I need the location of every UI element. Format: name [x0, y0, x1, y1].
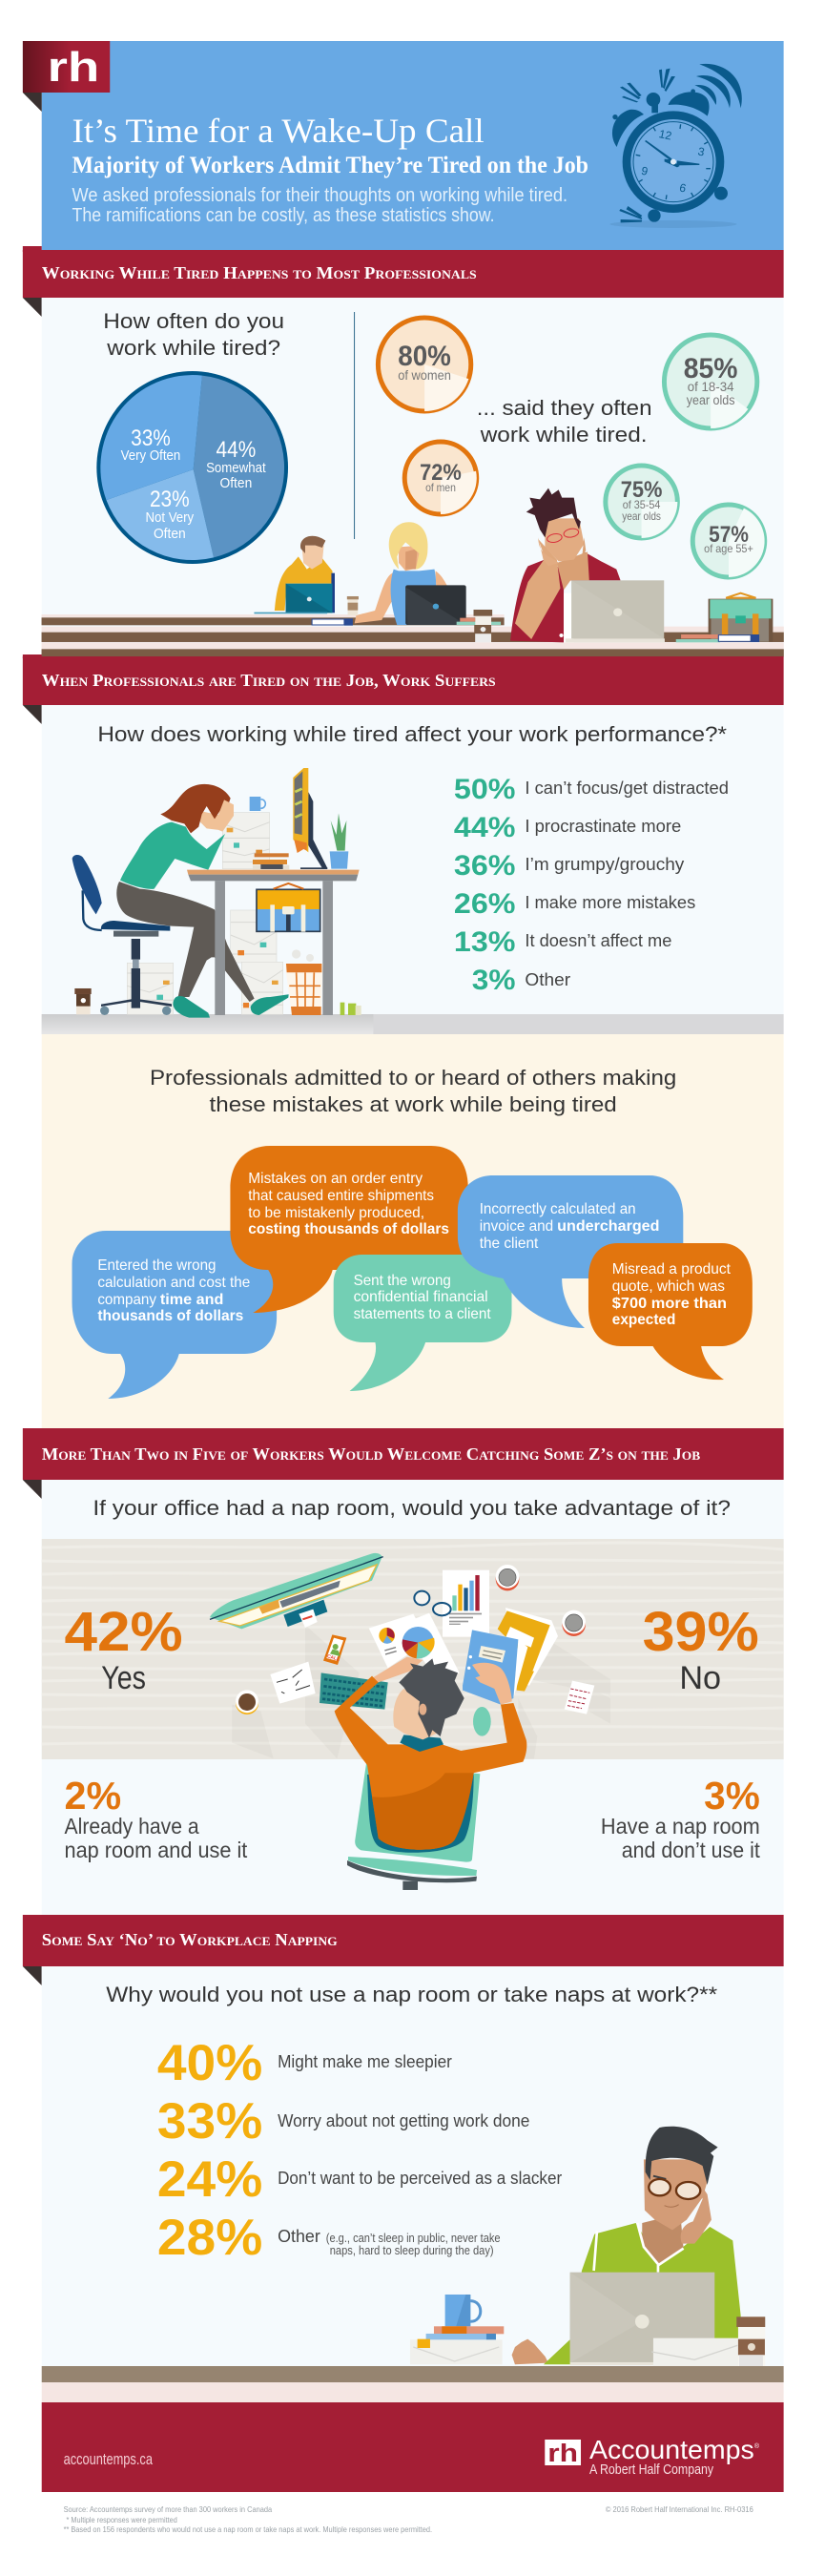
stat: 3% have and don't use: 3%: [704, 1774, 760, 1818]
stat: 42% yes: Yes: [101, 1660, 146, 1696]
chart paper: [443, 1570, 489, 1637]
circle: 75% of 35-54: 75%: [621, 477, 662, 503]
logo: [23, 41, 110, 112]
circle: 85% of 18-34: [664, 335, 757, 428]
reasons list: 24%: [157, 2151, 262, 2208]
circle: 85% of 18-34: year olds: [687, 392, 734, 407]
man: [544, 2127, 742, 2365]
panel: nap room: [42, 1480, 784, 1915]
stats list: I procrastinate more: [525, 817, 681, 836]
circle: 72% of men: of men: [425, 481, 456, 494]
pie chart: Very Often: [121, 447, 180, 464]
bubble: invoice: Incorrectly calculated an: [480, 1201, 636, 1217]
text: said they often: work while tired.: [480, 423, 648, 447]
bubble: wrong calculation: time and: [160, 1292, 223, 1308]
circle: 57% of age 55+: [692, 505, 765, 577]
stats list: Other: [525, 970, 570, 989]
books and mug: [250, 797, 289, 870]
mouse: [473, 1707, 491, 1736]
bubble: order entry: Mistakes on an order entry: [248, 1171, 423, 1187]
stat: 2% already have: Already have a: [65, 1814, 199, 1839]
reasons list: naps, hard to sleep during the day): [330, 2243, 494, 2257]
bubble: product quote: expected: [612, 1312, 675, 1328]
stats list: I’m grumpy/grouchy: [525, 855, 684, 874]
bubble: order entry: costing thousands of dollars: [248, 1221, 449, 1237]
circle: 85% of 18-34: 85%: [684, 353, 737, 384]
monitor: [293, 768, 327, 869]
accountemps logo: rh: [547, 2441, 578, 2467]
section ribbon 1: [23, 246, 784, 317]
section ribbon 3: [23, 1428, 784, 1499]
bubble: product quote: [588, 1243, 753, 1380]
section ribbon 4: [23, 1915, 784, 1985]
accountemps logo: Accountemps: [589, 2435, 754, 2464]
bubble: product quote: $700 more than: [612, 1296, 727, 1312]
circle: 80% of women: 80%: [398, 341, 451, 372]
stats list: 13%: [454, 926, 515, 958]
reasons list: 40%: [157, 2035, 262, 2091]
reasons list: Don’t want to be perceived as a slacker: [278, 2169, 562, 2188]
papers and coffee: [651, 2316, 765, 2368]
bubble: wrong calculation: thousands of dollars: [97, 1308, 243, 1324]
pie chart: 44%: [217, 437, 256, 463]
footer url: accountemps.ca: [64, 2450, 153, 2468]
reasons list: 33%: [157, 2093, 262, 2150]
section ribbon 2: [23, 654, 784, 724]
bubble: financial statements: confidential financial: [354, 1289, 488, 1305]
coffee cup: [74, 988, 92, 1014]
pie chart: 23%: [150, 487, 190, 512]
stat: 39% no: 39%: [643, 1602, 759, 1663]
bubble: invoice: the client: [480, 1236, 539, 1252]
footer: [42, 2402, 784, 2492]
section ribbon 4: Some Say ‘No’ to Workplace Napping: [42, 1930, 338, 1949]
stat: 39% no: [643, 1602, 759, 1696]
bubble: wrong calculation: [72, 1231, 277, 1399]
stat: 42% yes: 42%: [65, 1602, 183, 1663]
bubble: financial statements: statements to a client: [354, 1306, 491, 1322]
desk band: [42, 2366, 784, 2402]
bubble: order entry: [230, 1146, 468, 1313]
bubble: invoice: invoice and: [480, 1218, 553, 1235]
icon: alarm clock: 6: [678, 180, 688, 196]
text: said they often: [477, 396, 652, 447]
note: [270, 1662, 316, 1704]
stat: 3% have and don't use: [601, 1774, 760, 1862]
bubble: product quote: quote, which was: [612, 1278, 725, 1295]
circle: 72% of men: [404, 442, 477, 514]
office chair: [72, 855, 172, 1015]
icon: alarm clock: 12: [658, 127, 673, 143]
pie chart: Somewhat: [206, 460, 266, 476]
circle: 57% of age 55+: 57%: [709, 522, 749, 548]
plant: [330, 813, 348, 869]
source notes: [64, 2504, 753, 2534]
circle: 85% of 18-34: of 18-34: [688, 379, 734, 394]
source notes: © 2016 Robert Half International Inc. RH-0316: [606, 2504, 753, 2514]
paper stacks: [127, 813, 283, 1014]
stats list: 50%: [454, 774, 515, 805]
bubble: wrong calculation: calculation and cost the: [97, 1275, 250, 1291]
reasons list: (e.g., can’t sleep in public, never take: [326, 2231, 501, 2245]
illustration: man with laptop: [410, 2127, 765, 2368]
stat: 3% have and don't use: Have a nap room: [601, 1814, 760, 1839]
desk shadows: [232, 1625, 610, 1758]
heading: how often: How often do you: [103, 309, 284, 333]
icon: alarm clock: 3: [697, 144, 706, 159]
stat: 39% no: No: [679, 1660, 721, 1696]
source notes: * Multiple responses were permitted: [67, 2515, 177, 2524]
reasons list: Worry about not getting work done: [278, 2111, 529, 2130]
heading: how often: work while tired?: [106, 336, 280, 360]
circle: 57% of age 55+: of age 55+: [704, 542, 753, 555]
stats list: 44%: [454, 812, 515, 843]
stats list: I can’t focus/get distracted: [525, 779, 729, 798]
stat: 2% already have: nap room and use it: [65, 1838, 248, 1862]
coffee cup: [236, 1690, 258, 1714]
pie chart: [96, 371, 288, 564]
desk: [187, 870, 360, 1015]
accountemps logo: [545, 2435, 760, 2478]
icon: alarm clock: [609, 64, 742, 228]
checklist note: [565, 1681, 594, 1714]
cans on floor: [340, 1003, 361, 1015]
heading: reasons: Why would you not use a nap room or take naps at work?**: [106, 1983, 718, 2006]
bubble: financial statements: [334, 1255, 511, 1391]
reasons list: 28%: [157, 2210, 262, 2266]
heading: how often: [103, 309, 284, 360]
bubble: financial statements: Sent the wrong: [354, 1273, 451, 1289]
wood desk band: [42, 1539, 784, 1759]
reasons list: Might make me sleepier: [278, 2052, 452, 2071]
intro text: We asked professionals for their thoughts on working while tired.: [72, 185, 567, 206]
stats list: [454, 774, 729, 996]
circle: 75% of 35-54: of 35-54: [623, 498, 661, 511]
accountemps logo: A Robert Half Company: [589, 2462, 714, 2478]
source notes: ** Based on 156 respondents who would not use a nap room or take naps at work. Multiple responses were permitted.: [64, 2524, 432, 2534]
bubble: invoice: [458, 1175, 683, 1328]
mug and books: [410, 2295, 504, 2364]
illustration: top view man at desk: [210, 1553, 610, 1890]
icon: alarm clock: 9: [640, 164, 650, 178]
heading: nap room: If your office had a nap room, would you take advantage of it?: [93, 1496, 731, 1520]
worker: tired man with glasses: [510, 488, 665, 642]
heading: mistakes: these mistakes at work while being tired: [210, 1092, 617, 1116]
blue folder: [463, 1630, 527, 1705]
pie chart: Not Very: [146, 509, 195, 526]
bubble: order entry: that caused entire shipments: [248, 1188, 434, 1204]
stats list: 36%: [454, 850, 515, 882]
phone: CALL: [326, 1653, 340, 1663]
floor: [42, 1014, 784, 1034]
circle: 75% of 35-54: year olds: [622, 509, 661, 523]
heading: work performance: How does working while tired affect your work performance?*: [97, 722, 728, 746]
section ribbon 3: More Than Two in Five of Workers Would Welcome Catching Some Z’s on the Job: [42, 1444, 701, 1464]
section ribbon 2: When Professionals are Tired on the Job, Work Suffers: [42, 671, 496, 690]
bubble: order entry: to be mistakenly produced,: [248, 1205, 424, 1221]
waste bin: [285, 949, 322, 1015]
panel: mistakes: [42, 1034, 784, 1428]
bubble: product quote: Misread a product: [612, 1261, 732, 1278]
accountemps logo: ®: [754, 2442, 760, 2450]
circle: 80% of women: of women: [398, 367, 451, 383]
monitor: [210, 1553, 383, 1629]
books right: [676, 634, 759, 642]
illustration: tired woman at desk: [72, 768, 361, 1018]
stats list: It doesn’t affect me: [525, 931, 671, 950]
panel: work performance: [42, 705, 784, 1034]
pie chart papers: [369, 1613, 460, 1682]
hand: [512, 2339, 548, 2364]
source notes: Source: Accountemps survey of more than 300 workers in Canada: [64, 2504, 272, 2514]
stats list: 26%: [454, 888, 515, 920]
keyboard: [320, 1672, 388, 1710]
stat: 2% already have: 2%: [65, 1774, 121, 1818]
worker: blonde woman: [312, 522, 501, 626]
coffee cup: [474, 610, 492, 642]
worker: man in yellow hoodie: [254, 536, 335, 613]
stats list: 3%: [472, 965, 515, 996]
heading: mistakes: [150, 1066, 676, 1116]
bubble: invoice: undercharged: [557, 1218, 659, 1235]
desks and workers: [42, 488, 784, 656]
stat: 2% already have: [65, 1774, 248, 1862]
chair: [347, 1763, 480, 1890]
cups: [496, 1565, 586, 1636]
bubble: wrong calculation: Entered the wrong: [97, 1257, 217, 1274]
bubble: wrong calculation: company: [97, 1292, 156, 1308]
subtitle: Majority of Workers Admit They’re Tired on the Job: [72, 153, 588, 178]
bag: [709, 593, 773, 642]
panel: working while tired: [42, 298, 784, 656]
man in orange: [335, 1657, 526, 1850]
header panel: [23, 41, 784, 250]
pie chart: 33%: [131, 426, 171, 451]
intro text: [72, 185, 567, 226]
panel: reasons against napping: [42, 1966, 784, 2368]
circle: 80% of women: [378, 318, 471, 411]
glasses: [414, 1591, 451, 1615]
stats list: I make more mistakes: [525, 893, 695, 912]
phone: [323, 1634, 346, 1665]
section ribbon 1: Working While Tired Happens to Most Professionals: [42, 263, 477, 282]
briefcase: [257, 883, 320, 932]
yellow folder: [498, 1608, 558, 1692]
woman: [116, 784, 289, 1018]
stat: 3% have and don't use: and don’t use it: [622, 1838, 760, 1862]
logo: rh: [48, 44, 99, 91]
stat: 42% yes: [65, 1602, 183, 1696]
reasons list: [157, 2035, 562, 2266]
reasons list: Other: [278, 2227, 320, 2246]
text: said they often: ... said they often: [477, 396, 652, 420]
title: It’s Time for a Wake-Up Call: [72, 112, 485, 150]
circle: 75% of 35-54: [606, 466, 677, 538]
heading: mistakes: Professionals admitted to or heard of others making: [150, 1066, 676, 1090]
circle: 72% of men: 72%: [420, 460, 462, 486]
pie chart: Often: [219, 475, 252, 491]
pie chart: Often: [154, 526, 186, 542]
intro text: The ramifications can be costly, as these statistics show.: [72, 205, 495, 226]
